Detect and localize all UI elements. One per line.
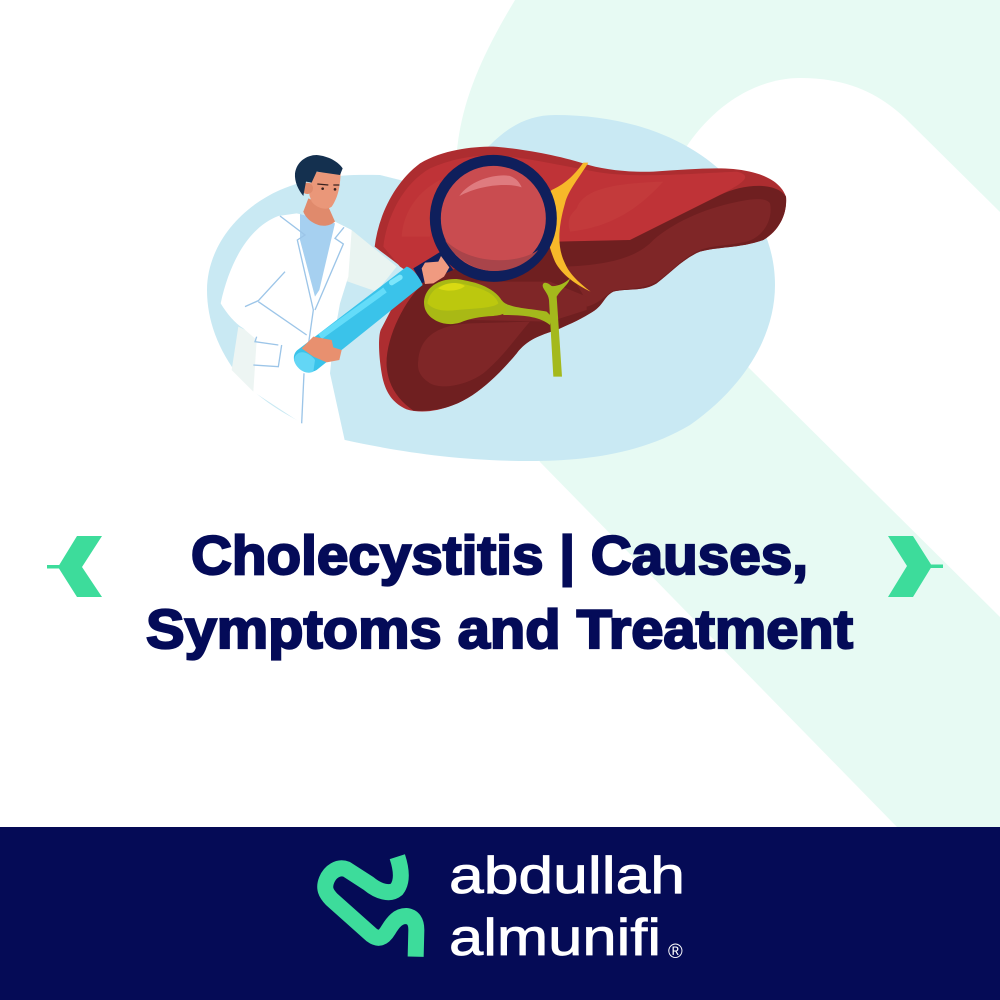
left arrow (47, 536, 102, 597)
doctor neck and head (295, 155, 343, 226)
doctor figure (221, 155, 397, 442)
liver illustration (375, 147, 786, 411)
doctor lab coat (221, 213, 397, 442)
gallbladder (424, 279, 506, 324)
magnifying glass lens (435, 160, 551, 276)
coat seam lines (245, 216, 344, 423)
footer banner (0, 827, 1000, 1000)
background mint ribbon (457, 0, 1000, 827)
doctor shirt (300, 214, 335, 297)
liver base shape (375, 147, 786, 411)
doctor hand on magnifier (422, 256, 449, 284)
logo wordmark (449, 847, 685, 967)
right arrow (888, 536, 943, 597)
liver upper lobe highlight (383, 155, 745, 280)
title: Symptoms and Treatment (146, 598, 853, 660)
magnifier handle (294, 252, 453, 373)
bile duct (502, 278, 570, 377)
title (146, 524, 853, 660)
logo wordmark: almunifi (449, 909, 661, 967)
logo wordmark: abdullah (449, 847, 685, 905)
liver dark underside (387, 186, 786, 411)
yellow ligament (542, 163, 591, 292)
pale blue blob behind illustration (207, 115, 775, 461)
doctor hand on handle (302, 337, 342, 362)
logo mark (325, 857, 416, 957)
logo wordmark: ® (668, 941, 683, 963)
liver mid-tone patches (418, 199, 771, 386)
title: Cholecystitis | Causes, (191, 524, 808, 587)
